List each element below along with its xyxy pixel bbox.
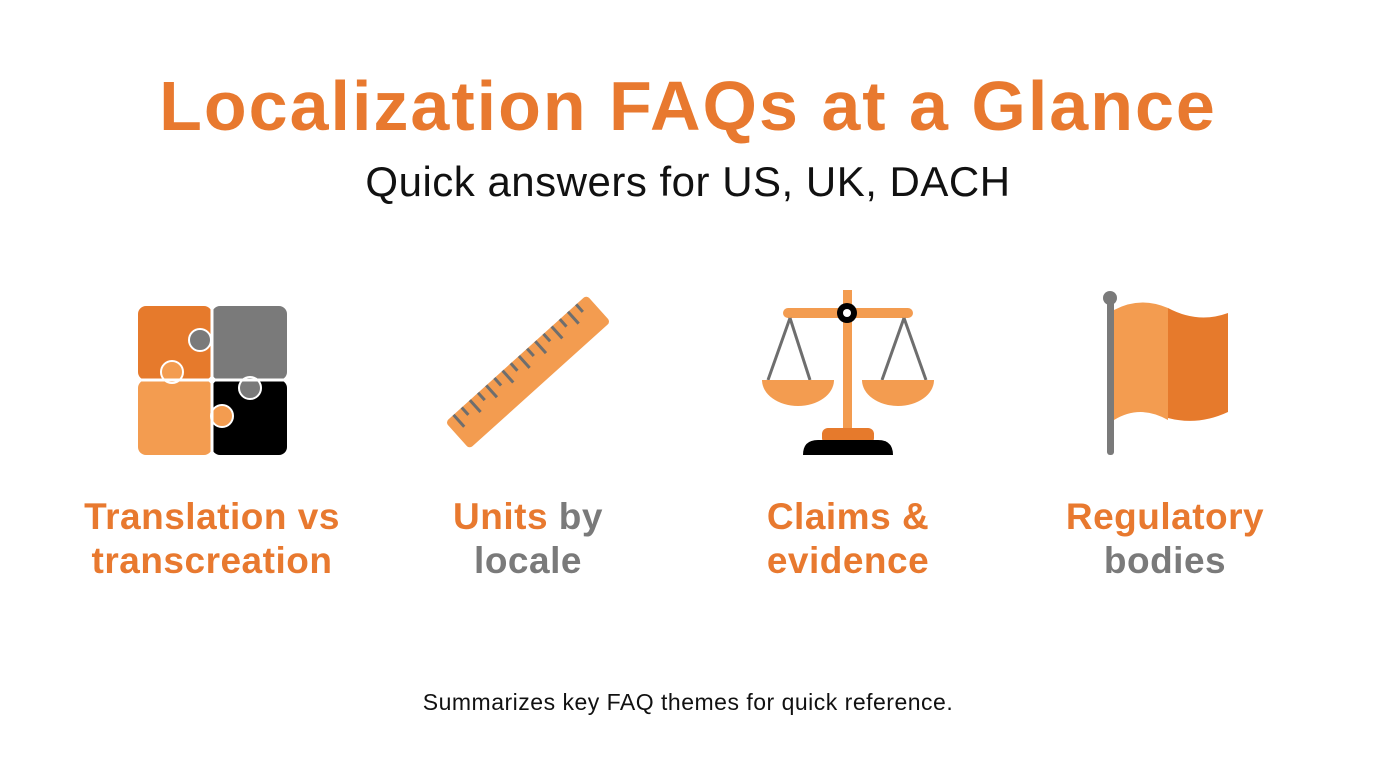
icon: scales (762, 290, 934, 455)
label: claims (767, 496, 929, 581)
label: translation: Translation vs (84, 496, 340, 537)
footer: Summarizes key FAQ themes for quick reference. (423, 689, 953, 715)
icon: ruler (445, 295, 611, 449)
label: regulatory: bodies (1104, 540, 1226, 581)
icon: flag (1103, 291, 1228, 455)
label: translation (84, 496, 340, 581)
icon: puzzle (138, 306, 287, 455)
label: claims: evidence (767, 540, 929, 581)
label: claims: Claims & (767, 496, 929, 537)
subtitle: Quick answers for US, UK, DACH (365, 158, 1011, 205)
label: units: locale (474, 540, 582, 581)
title: Localization FAQs at a Glance (159, 67, 1217, 145)
label: regulatory: Regulatory (1066, 496, 1264, 537)
label: regulatory (1066, 496, 1264, 581)
label: translation: transcreation (92, 540, 332, 581)
label: units: Units by (453, 496, 603, 537)
label: units (453, 496, 603, 581)
